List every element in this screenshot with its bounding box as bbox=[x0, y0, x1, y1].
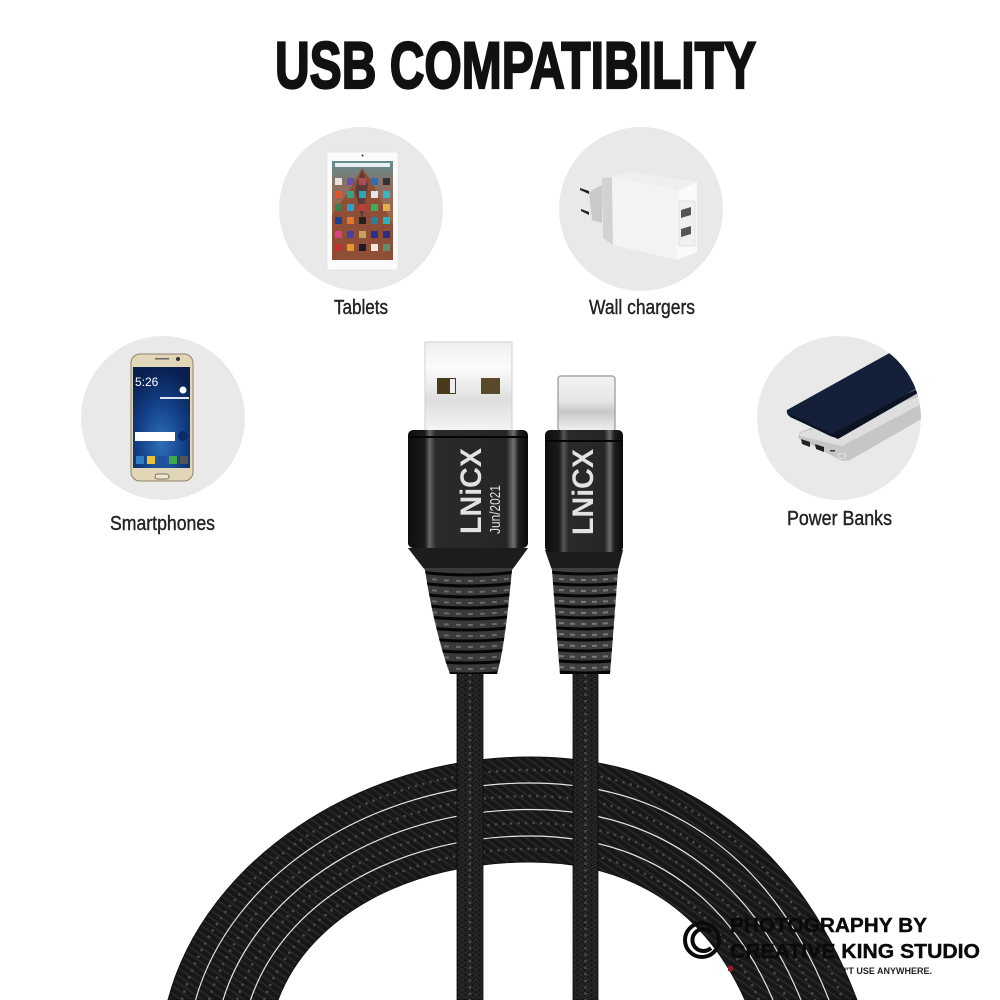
logo: LNiCX on USB-C: LNiCX bbox=[567, 449, 600, 535]
date code: Jun/2021 bbox=[487, 485, 504, 534]
icon: smartphone bbox=[131, 354, 193, 481]
label: smartphones: Smartphones bbox=[110, 513, 215, 535]
USB-A connector cable bbox=[405, 342, 531, 1000]
icon background: smartphones bbox=[81, 336, 245, 500]
watermark line one: PHOTOGRAPHY BY bbox=[730, 914, 927, 937]
watermark accent bbox=[728, 966, 733, 971]
panel: tablets bbox=[279, 127, 443, 319]
icon background: wall chargers bbox=[559, 127, 723, 291]
panel: power banks bbox=[757, 336, 930, 530]
USB-A housing bbox=[408, 430, 528, 548]
watermark line three: DON'T USE ANYWHERE. bbox=[826, 966, 932, 976]
USB-C boot with strain relief bbox=[543, 548, 625, 674]
icon background: power banks bbox=[757, 336, 921, 500]
title: USB COMPATIBILITY bbox=[275, 28, 756, 102]
icon: tablet bbox=[327, 152, 398, 270]
logo: LNiCX on USB-A: LNiCX bbox=[455, 448, 488, 534]
icon: copyright mark bbox=[685, 923, 719, 957]
USB-C connector cable bbox=[543, 376, 625, 1000]
label: wall chargers: Wall chargers bbox=[589, 297, 695, 319]
cable: USB-A strand bbox=[457, 668, 483, 1000]
cable: USB-C strand bbox=[573, 668, 598, 1000]
USB-C housing bbox=[545, 430, 623, 552]
label: power banks: Power Banks bbox=[787, 508, 892, 530]
coiled braided cable bbox=[168, 757, 857, 1000]
USB-C metal plug bbox=[558, 376, 615, 431]
icon: smartphone: 5:26 bbox=[135, 375, 159, 389]
watermark bbox=[685, 914, 980, 976]
icon: wall charger bbox=[580, 172, 697, 260]
USB-A metal plug bbox=[425, 342, 512, 431]
icon background: tablets bbox=[279, 127, 443, 291]
icon: power bank bbox=[787, 350, 930, 461]
panel: wall chargers bbox=[559, 127, 723, 319]
USB-A boot with strain relief bbox=[405, 546, 531, 674]
label: tablets: Tablets bbox=[334, 297, 388, 319]
panel: smartphones bbox=[81, 336, 245, 535]
watermark line two: CREATIVE KING STUDIO bbox=[730, 940, 980, 963]
